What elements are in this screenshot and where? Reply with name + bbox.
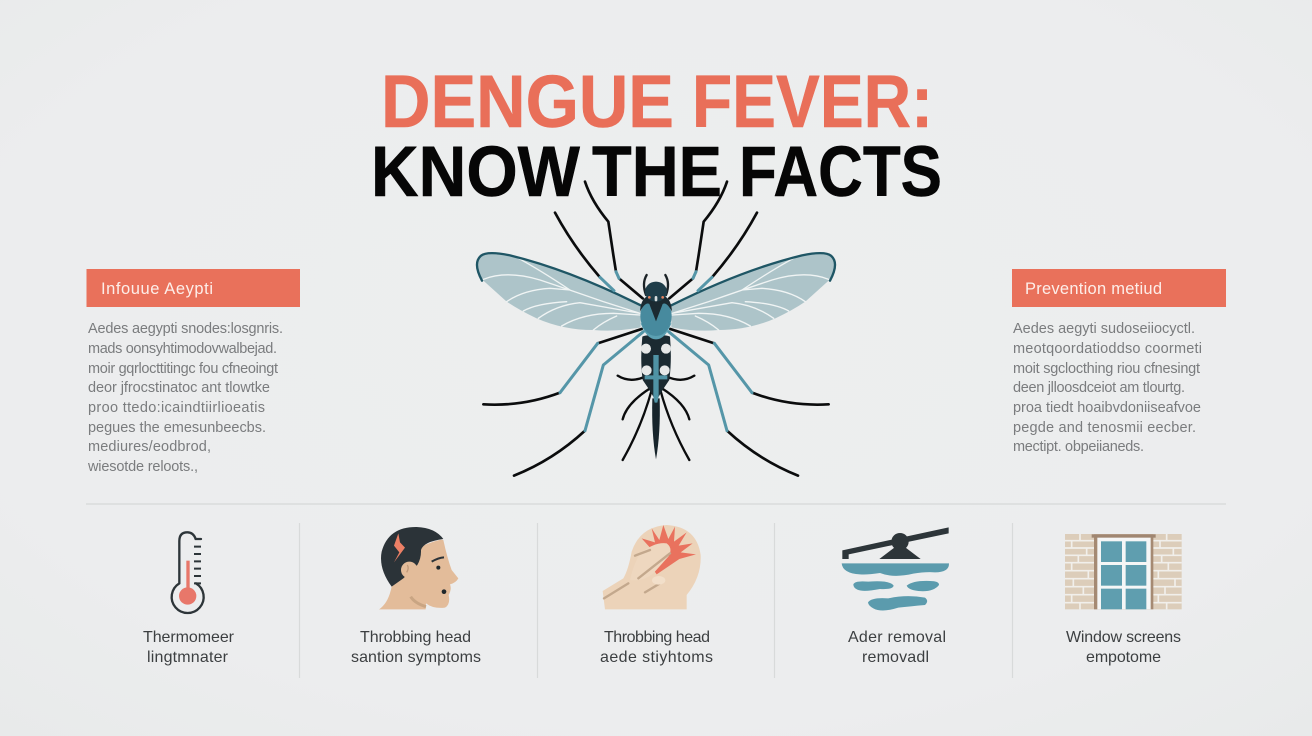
symptom: hand on head <box>600 525 713 666</box>
label: hand on head: aede stiyhtoms <box>600 649 713 666</box>
left panel body text: deor jfrocstinatoc ant tlowtke <box>88 380 270 396</box>
symptom: thermometer <box>143 532 235 666</box>
label: water removal: Ader removal <box>848 629 946 646</box>
label: head profile: Throbbing head <box>360 629 471 646</box>
title line: Know the Facts: THE <box>592 133 722 212</box>
left panel body text: moir gqrlocttitingc fou cfneoingt <box>88 361 278 377</box>
title <box>371 60 942 212</box>
label: thermometer <box>143 629 235 666</box>
panel: right info <box>1012 269 1226 455</box>
right panel body text: mectipt. obpeiianeds. <box>1013 439 1144 455</box>
icon: hand holding painful head <box>603 525 701 609</box>
label: head profile: santion symptoms <box>351 649 481 666</box>
label: thermometer: Thermomeer <box>143 629 235 646</box>
left panel header: Infouue Aeypti <box>101 280 213 298</box>
title line: Dengue Fever: FEVER: <box>692 60 933 143</box>
title line: Know the Facts <box>371 133 942 212</box>
icon: thermometer <box>172 532 204 613</box>
label: hand on head: Throbbing head <box>604 629 710 646</box>
bottom divider <box>86 503 1226 505</box>
mosquito illustration <box>477 182 835 476</box>
right panel body text: proa tiedt hoaibvdoniiseafvoe <box>1013 400 1201 416</box>
left panel body text <box>87 321 283 475</box>
icon: head with lightning bolt <box>379 527 458 609</box>
panel: left info <box>86 269 300 475</box>
title line: Know the Facts: FACTS <box>739 133 942 212</box>
right panel body text: meotqoordatioddso coormeti <box>1013 341 1202 357</box>
prevention: water removal <box>842 527 949 666</box>
label: hand on head <box>600 629 713 666</box>
left legs and wing <box>477 182 652 476</box>
left panel body text: mediures/eodbrod, <box>88 439 211 455</box>
right panel body text <box>1013 321 1202 455</box>
left panel body text: proo ttedo:icaindtiirlioeatis <box>88 400 265 416</box>
right panel body text: moit sgclocthing riou cfnesingt <box>1013 361 1200 377</box>
mosquito body <box>640 282 672 459</box>
title line: Know the Facts: KNOW <box>371 133 580 212</box>
prevention: window screens <box>1065 534 1182 666</box>
left panel body text: Aedes aegypti snodes:losgnris. <box>88 321 283 337</box>
right panel body text: deen jlloosdceiot am tlourtg. <box>1013 380 1185 396</box>
right legs and wing <box>660 182 835 476</box>
left panel header <box>86 269 300 307</box>
left panel body text: mads oonsyhtimodovwalbejad. <box>88 341 277 357</box>
right panel body text: Aedes aegyti sudoseiiocyctl. <box>1013 321 1195 337</box>
label: water removal <box>848 629 946 666</box>
icon: scoop over water <box>842 527 949 611</box>
right panel header <box>1012 269 1226 307</box>
right panel header: Prevention metiud <box>1025 280 1162 298</box>
label: head profile <box>351 629 481 666</box>
title line: Dengue Fever: DENGUE <box>381 60 674 143</box>
label: window screens <box>1066 629 1181 666</box>
title line: Dengue Fever <box>381 60 933 143</box>
icon: window in brick wall <box>1065 534 1182 609</box>
label: thermometer: lingtmnater <box>147 649 229 666</box>
label: water removal: removadl <box>862 649 929 666</box>
left panel body text: pegues the emesunbeecbs. <box>88 420 266 436</box>
right panel body text: pegde and tenosmii eecber. <box>1013 420 1196 436</box>
label: window screens: Window screens <box>1066 629 1181 646</box>
symptom: head profile <box>351 527 481 666</box>
left panel body text: wiesotde reloots., <box>87 459 198 475</box>
label: window screens: empotome <box>1086 649 1161 666</box>
